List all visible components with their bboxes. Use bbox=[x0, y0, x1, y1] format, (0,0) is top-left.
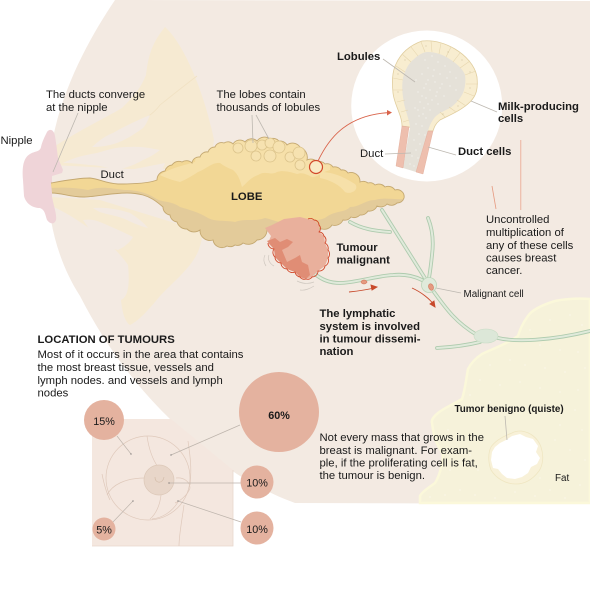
text: not every mass: ple, if the proliferating cell is fat, bbox=[320, 458, 478, 470]
text: uncontrolled multiplication: multiplication of bbox=[486, 227, 565, 239]
text: location description: the most breast tissue, vessels and bbox=[38, 362, 214, 374]
lymph node lower bbox=[474, 329, 498, 343]
bubble: 15%: 15% bbox=[93, 416, 115, 428]
malignant cell in vessel bbox=[361, 280, 367, 284]
label: tumour malignant: malignant bbox=[336, 254, 390, 266]
bubble: 5% bbox=[92, 518, 116, 540]
cell dividers bbox=[393, 41, 478, 122]
text: lymphatic system: The lymphatic bbox=[320, 308, 395, 320]
bubble: 15% bbox=[84, 400, 124, 440]
text: location description: nodes bbox=[38, 388, 69, 400]
lymphatic vessels bbox=[315, 210, 590, 348]
malignant cell in node bbox=[428, 283, 434, 291]
heading: location of tumours: LOCATION OF TUMOURS bbox=[38, 334, 175, 346]
speckles bbox=[410, 56, 456, 166]
bubble: 5%: 5% bbox=[96, 524, 112, 536]
tumour motion marks bbox=[264, 255, 314, 290]
bubble: 60% bbox=[239, 372, 319, 452]
label: ducts converge: at the nipple bbox=[46, 102, 108, 114]
breast diagram bbox=[102, 436, 191, 546]
red dissemination arrows bbox=[349, 285, 435, 307]
label: milk-producing cells: cells bbox=[498, 113, 523, 125]
bubble: 10% lower: 10% bbox=[246, 524, 268, 536]
label: duct: Duct bbox=[100, 169, 125, 181]
text: lymphatic system: nation bbox=[320, 346, 353, 358]
label: lobes contain: thousands of lobules bbox=[216, 102, 320, 114]
label: milk-producing cells: Milk-producing bbox=[498, 101, 579, 113]
text: location description: lymph nodes. and vessels and lymph bbox=[38, 375, 223, 387]
text: lymphatic system: in tumour dissemi- bbox=[320, 334, 421, 346]
label: tumour malignant: Tumour bbox=[336, 242, 378, 254]
label: lobes contain: The lobes contain bbox=[216, 89, 306, 101]
text: uncontrolled multiplication: cancer. bbox=[486, 265, 522, 277]
lymph node upper bbox=[422, 278, 436, 292]
back lobes and ducts bbox=[50, 27, 214, 325]
white detail circle bbox=[351, 30, 502, 182]
leader lines bbox=[113, 425, 241, 522]
text: uncontrolled multiplication: any of these cells bbox=[486, 240, 574, 252]
text: not every mass: Not every mass that grows in the bbox=[320, 432, 484, 444]
background: breast silhouette bbox=[48, 0, 590, 504]
text: location description: Most of it occurs in the area that contains bbox=[38, 349, 243, 361]
label: nipple: Nipple bbox=[0, 135, 33, 147]
lobules on the lobe bbox=[233, 138, 305, 170]
label: detail duct: Duct bbox=[360, 148, 384, 160]
text: not every mass: breast is malignant. For exam- bbox=[320, 445, 472, 457]
nipple bbox=[23, 130, 63, 223]
label: lobules: Lobules bbox=[337, 51, 380, 63]
duct wall left bbox=[396, 126, 409, 168]
label: duct cells: Duct cells bbox=[458, 146, 511, 158]
duct wall right bbox=[416, 131, 433, 174]
highlighted lobule bbox=[310, 160, 322, 174]
leader lines and accent strokes bbox=[53, 59, 521, 440]
location panel bbox=[92, 419, 241, 546]
arrow: lobule to detail bbox=[318, 110, 392, 161]
main lobe with duct bbox=[50, 136, 405, 248]
benign cyst bbox=[489, 431, 543, 484]
zoomed lobule bbox=[392, 41, 478, 174]
label: fat: Fat bbox=[555, 473, 569, 484]
malignant tumour bbox=[264, 217, 330, 290]
text: lymphatic system: system is involved bbox=[320, 321, 420, 333]
label: malignant cell: Malignant cell bbox=[464, 289, 524, 300]
text: uncontrolled multiplication: causes breast bbox=[486, 252, 557, 264]
bubble: 10% lower bbox=[240, 512, 274, 544]
bubble: 10% middle bbox=[240, 466, 274, 498]
label: benign tumour: Tumor benigno (quiste) bbox=[454, 404, 564, 415]
text: not every mass: the tumour is benign. bbox=[320, 470, 425, 482]
label: lobe: LOBE bbox=[231, 191, 263, 203]
bubble: 60%: 60% bbox=[268, 410, 290, 422]
duct gaps bbox=[63, 115, 165, 250]
text: uncontrolled multiplication: Uncontrolled bbox=[486, 214, 549, 226]
fat region bbox=[420, 299, 590, 503]
bubble: 10% middle: 10% bbox=[246, 478, 268, 490]
label: ducts converge: The ducts converge bbox=[46, 89, 145, 101]
